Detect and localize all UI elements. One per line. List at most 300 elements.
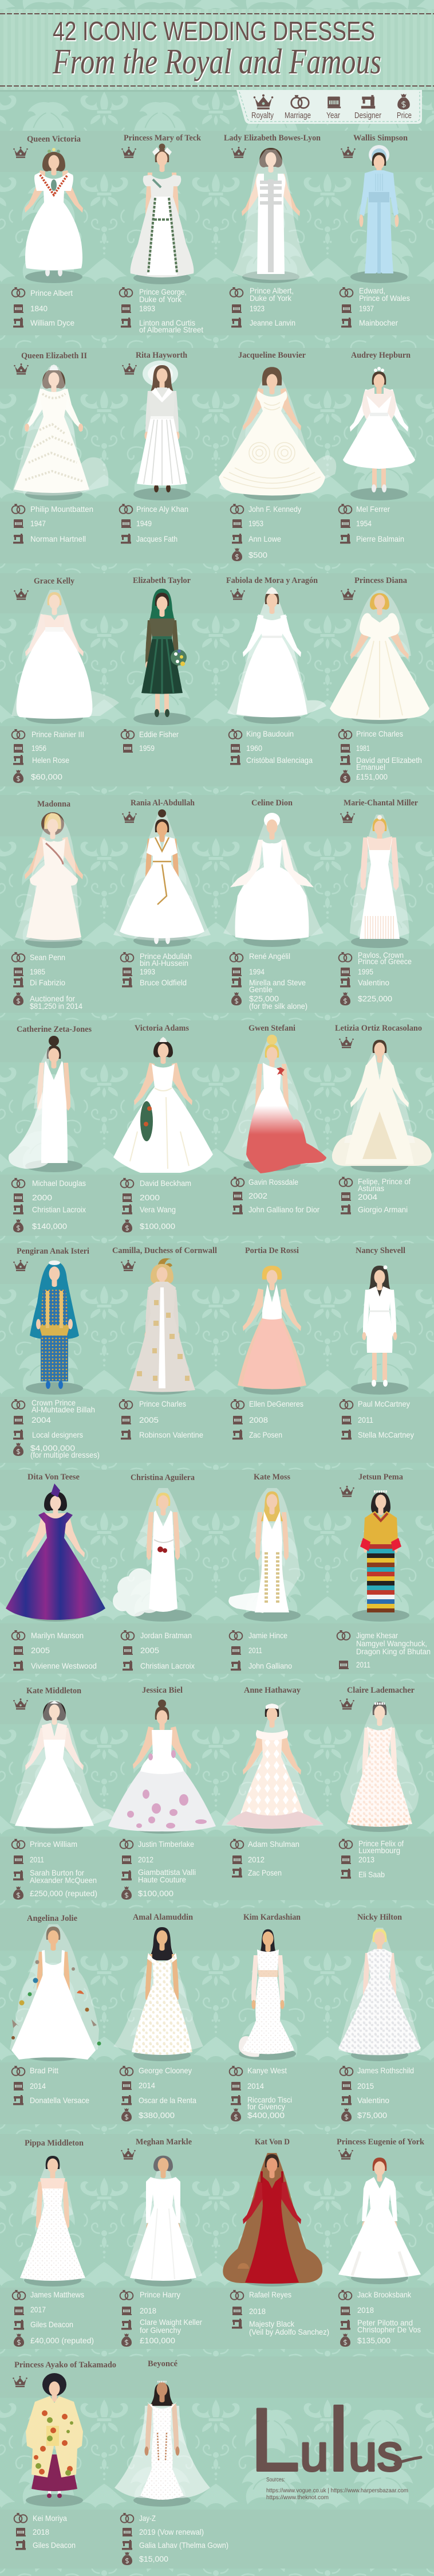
details: Pippa Middleton: [13, 2290, 94, 2347]
details: Catherine Zeta-Jones: [12, 1178, 86, 1232]
details: Dita Von Teese: Vivienne Westwood: [31, 1661, 97, 1670]
details: Marie-Chantal Miller: 1995: [358, 967, 373, 976]
card: Rita Hayworth: Rita Hayworth: [136, 351, 188, 360]
figure: Victoria Adams dress: [113, 1037, 213, 1173]
card: Celine Dion: Celine Dion: [251, 798, 293, 808]
details: Nancy Shevell: [340, 1399, 414, 1440]
details: Catherine Zeta-Jones: Christian Lacroix: [32, 1205, 86, 1214]
details: Victoria Adams: 2000: [140, 1193, 160, 1202]
card: Jacqueline Bouvier: [219, 351, 336, 561]
details: Marie-Chantal Miller: Pavlos, Crown: [358, 950, 404, 960]
card: Princess Diana: Princess Diana: [354, 576, 407, 585]
details: Marie-Chantal Miller: $225,000: [358, 994, 392, 1003]
details: Pengiran Anak Isteri: [12, 1398, 100, 1459]
figure: Catherine Zeta-Jones dress: [9, 1036, 82, 1172]
details: Kim Kardashian: $400,000: [247, 2111, 285, 2120]
details: Anne Hathaway: Zac Posen: [248, 1868, 282, 1877]
details: Kat Von D: 2018: [249, 2307, 266, 2316]
details: Audrey Hepburn: [339, 504, 404, 543]
details: Princess Eugenie of York: 2018: [357, 2305, 374, 2315]
details: Pippa Middleton: 2017: [30, 2305, 46, 2314]
sources: https://www.vogue.co.uk | https://www.harpersbazaar.com: [266, 2487, 408, 2494]
details: Gwen Stefani: 2002: [248, 1191, 267, 1200]
details: Victoria Adams: David Beckham: [140, 1179, 191, 1188]
figure: Jessica Biel dress: [108, 1700, 216, 1834]
figure: Grace Kelly dress: [11, 590, 119, 724]
details: Letizia Ortiz Rocasolano: Giorgio Armani: [358, 1205, 408, 1214]
details: Christina Aguilera: Christian Lacroix: [140, 1661, 195, 1670]
title banner: [0, 9, 434, 92]
details: Nancy Shevell: 2011: [358, 1415, 373, 1424]
figure: Madonna dress: [15, 812, 83, 948]
details: Grace Kelly: Prince Rainier III: [31, 730, 84, 739]
card: Kate Moss: Kate Moss: [254, 1473, 290, 1482]
details: Nancy Shevell: Paul McCartney: [358, 1399, 410, 1408]
card: Kim Kardashian: [230, 1913, 301, 2121]
details: Princess Ayako of Takamado: [14, 2513, 76, 2550]
card: Claire Lademacher: Claire Lademacher: [347, 1686, 415, 1695]
legend: Royalty: [251, 111, 274, 120]
card: Anne Hathaway: Anne Hathaway: [244, 1686, 301, 1695]
details: Kat Von D: Majesty Black: [249, 2319, 295, 2328]
details: Madonna: [12, 952, 82, 1011]
details: Wallis Simpson: [340, 286, 410, 328]
card: Wallis Simpson: [340, 134, 410, 328]
details: Victoria Adams: Vera Wang: [140, 1205, 176, 1214]
details: Elizabeth Taylor: 1959: [139, 743, 155, 753]
card: Dita Von Teese: Dita Von Teese: [27, 1473, 80, 1482]
legend: Year: [326, 111, 340, 120]
details: Marie-Chantal Miller: Valentino: [358, 978, 389, 987]
details: Jessica Biel: Haute Couture: [138, 1875, 186, 1884]
card: Princess Eugenie of York: [337, 2137, 425, 2347]
card: Amal Alamuddin: Amal Alamuddin: [133, 1913, 194, 1922]
figure: Anne Hathaway dress: [222, 1701, 323, 1834]
details: Princess Mary of Teck: Linton and Curtis: [139, 318, 195, 327]
details: Angelina Jolie: [12, 2066, 89, 2105]
card: Jessica Biel: Jessica Biel: [142, 1686, 183, 1695]
details: Fabiola de Mora y Aragón: 1960: [246, 743, 262, 753]
details: Camilla, Duchess of Cornwall: Prince Charles: [139, 1399, 186, 1408]
details: Catherine Zeta-Jones: $140,000: [32, 1222, 67, 1231]
figure: Nancy Shevell dress: [351, 1266, 408, 1395]
card: Portia De Rossi: [231, 1246, 306, 1440]
details: Jessica Biel: $100,000: [138, 1889, 173, 1898]
figure: Meghan Markle dress: [124, 2156, 202, 2287]
details: Princess Diana: David and Elizabeth: [356, 755, 422, 765]
details: Amal Alamuddin: [120, 2066, 196, 2121]
card: Pippa Middleton: Pippa Middleton: [25, 2139, 84, 2148]
figure: Queen Elizabeth II dress: [13, 365, 108, 500]
figure: Pippa Middleton dress: [20, 2156, 85, 2287]
details: Claire Lademacher: 2013: [358, 1855, 374, 1864]
card: Celine Dion: [223, 798, 323, 1011]
figure: Rania Al-Abdullah dress: [113, 809, 211, 947]
details: Fabiola de Mora y Aragón: King Baudouin: [246, 729, 294, 738]
figure: Kate Moss dress: [228, 1488, 301, 1622]
card: Madonna: Madonna: [37, 800, 70, 809]
details: Kat Von D: Rafael Reyes: [249, 2290, 291, 2299]
details: Pippa Middleton: £40,000 (reputed): [30, 2336, 94, 2345]
card: Portia De Rossi: Portia De Rossi: [245, 1246, 299, 1255]
figure: Camilla, Duchess of Cornwall dress: [129, 1258, 195, 1395]
details: Dita Von Teese: [12, 1630, 97, 1670]
details: Kat Von D: (Veil by Adolfo Sanchez): [249, 2327, 329, 2336]
details: Beyoncé: 2019 (Vow renewal): [139, 2527, 204, 2536]
card: Meghan Markle: [120, 2137, 202, 2347]
card: Gwen Stefani: Gwen Stefani: [248, 1024, 295, 1033]
details: Lady Elizabeth Bowes-Lyon: 1923: [250, 304, 265, 313]
details: Queen Victoria: Prince Albert: [30, 288, 73, 297]
details: Queen Elizabeth II: Philip Mountbatten: [30, 504, 93, 514]
details: Audrey Hepburn: Pierre Balmain: [356, 534, 404, 543]
details: Audrey Hepburn: Mel Ferrer: [356, 504, 390, 514]
details: Madonna: Auctioned for: [30, 994, 75, 1003]
details: Lady Elizabeth Bowes-Lyon: Duke of York: [250, 293, 292, 303]
details: Kim Kardashian: 2014: [247, 2081, 264, 2090]
figure: Beyoncé dress: [115, 2382, 210, 2507]
details: Meghan Markle: 2018: [140, 2306, 156, 2315]
details: Princess Mary of Teck: Duke of York: [139, 295, 182, 304]
card: Queen Elizabeth II: Queen Elizabeth II: [21, 351, 87, 361]
details: Madonna: $81,250 in 2014: [30, 1001, 82, 1011]
card: Grace Kelly: Grace Kelly: [34, 577, 74, 586]
figure: Fabiola de Mora y Aragón dress: [227, 587, 326, 724]
details: Christina Aguilera: [121, 1630, 195, 1670]
details: Jessica Biel: Giambattista Valli: [138, 1868, 196, 1877]
details: Meghan Markle: Clare Waight Keller: [140, 2317, 202, 2327]
details: Kim Kardashian: Riccardo Tisci: [247, 2095, 292, 2104]
details: Princess Mary of Teck: Prince George,: [139, 287, 187, 296]
details: Marie-Chantal Miller: [339, 950, 412, 1005]
details: Fabiola de Mora y Aragón: Cristóbal Balenciaga: [246, 755, 313, 765]
details: Pengiran Anak Isteri: 2004: [31, 1415, 51, 1424]
legend: Price: [397, 111, 412, 120]
card: Jessica Biel: [108, 1686, 216, 1900]
details: Nicky Hilton: [340, 2066, 414, 2121]
card: Audrey Hepburn: Audrey Hepburn: [351, 351, 411, 360]
details: Celine Dion: Mirella and Steve: [249, 978, 306, 987]
card: Madonna: [12, 800, 83, 1011]
card: Pippa Middleton: [13, 2139, 94, 2347]
details: Jacqueline Bouvier: [231, 504, 301, 561]
card: Queen Victoria: [12, 135, 83, 328]
figure: Princess Diana dress: [330, 590, 429, 724]
details: Pengiran Anak Isteri: Al-Muhtadee Billah: [31, 1405, 95, 1414]
card: Princess Mary of Teck: [120, 134, 203, 334]
details: Catherine Zeta-Jones: 2000: [32, 1193, 52, 1202]
figure: Jetsun Pema dress: [352, 1491, 409, 1622]
card: Amal Alamuddin: [113, 1913, 203, 2121]
details: Pippa Middleton: Giles Deacon: [30, 2320, 73, 2329]
figure: Audrey Hepburn dress: [343, 367, 415, 500]
logo: Lulus: Lulus: [250, 2390, 403, 2490]
details: Rania Al-Abdullah: 1993: [140, 967, 155, 976]
details: Kim Kardashian: for Givency: [247, 2102, 285, 2111]
details: Nicky Hilton: 2015: [357, 2081, 374, 2090]
details: Gwen Stefani: John Galliano for Dior: [248, 1205, 319, 1214]
details: Rania Al-Abdullah: Bruce Oldfield: [140, 978, 187, 987]
details: Elizabeth Taylor: Eddie Fisher: [139, 730, 179, 739]
details: Celine Dion: $25,000: [249, 994, 279, 1003]
figure: Celine Dion dress: [223, 813, 323, 947]
details: Angelina Jolie: 2014: [30, 2081, 46, 2090]
details: Queen Elizabeth II: 1947: [30, 519, 46, 528]
card: Marie-Chantal Miller: Marie-Chantal Miller: [344, 798, 418, 808]
card: Rania Al-Abdullah: [113, 798, 211, 987]
details: Princess Ayako of Takamado: Giles Deacon: [33, 2540, 76, 2550]
card: Meghan Markle: Meghan Markle: [136, 2137, 192, 2147]
card: Princess Diana: [330, 576, 429, 783]
card: Lady Elizabeth Bowes-Lyon: [224, 134, 321, 328]
card: Wallis Simpson: Wallis Simpson: [353, 134, 408, 143]
details: Grace Kelly: 1956: [31, 743, 46, 753]
figure: Queen Victoria dress: [25, 148, 83, 283]
card: Princess Ayako of Takamado: [13, 2360, 116, 2550]
details: Audrey Hepburn: 1954: [356, 519, 372, 528]
details: Kim Kardashian: Kanye West: [247, 2066, 287, 2075]
card: Nicky Hilton: [338, 1913, 421, 2121]
card: Letizia Ortiz Rocasolano: [332, 1024, 432, 1214]
card: Camilla, Duchess of Cornwall: [112, 1246, 217, 1440]
figure: Kat Von D dress: [223, 2153, 322, 2287]
details: Queen Victoria: 1840: [30, 304, 48, 313]
figure: Princess Mary of Teck dress: [131, 143, 194, 284]
figure: Pengiran Anak Isteri dress: [26, 1260, 83, 1395]
details: Princess Diana: £151,000: [356, 772, 388, 781]
details: Anne Hathaway: Adam Shulman: [248, 1839, 299, 1849]
details: Jetsun Pema: Namgyel Wangchuck,: [356, 1639, 427, 1648]
sources: [266, 2476, 408, 2501]
details: Marie-Chantal Miller: Prince of Greece: [358, 957, 412, 966]
details: Rita Hayworth: 1949: [136, 519, 152, 528]
figure: Christina Aguilera dress: [113, 1488, 192, 1622]
card: Princess Eugenie of York: Princess Eugenie of York: [337, 2137, 425, 2147]
details: Kate Middleton: [12, 1839, 97, 1900]
details: Jetsun Pema: 2011: [356, 1660, 370, 1669]
details: Beyoncé: Galia Lahav (Thelma Gown): [139, 2540, 228, 2550]
details: Grace Kelly: $60,000: [31, 772, 62, 781]
details: Fabiola de Mora y Aragón: [229, 729, 313, 765]
figure: Kate Middleton dress: [10, 1700, 116, 1834]
details: Queen Elizabeth II: [12, 504, 93, 543]
card: Angelina Jolie: Angelina Jolie: [27, 1914, 77, 1923]
details: Amal Alamuddin: $380,000: [139, 2111, 175, 2120]
details: Lady Elizabeth Bowes-Lyon: Prince Albert,: [250, 286, 294, 295]
details: Angelina Jolie: Donatella Versace: [30, 2096, 89, 2105]
details: Kate Moss: [230, 1630, 292, 1670]
card: Rita Hayworth: [120, 351, 191, 543]
figure: Jacqueline Bouvier dress: [219, 367, 336, 500]
card: Claire Lademacher: [340, 1686, 419, 1879]
details: Meghan Markle: Prince Harry: [140, 2290, 180, 2299]
details: Dita Von Teese: 2005: [31, 1646, 50, 1655]
card: Victoria Adams: Victoria Adams: [135, 1024, 189, 1033]
details: Pengiran Anak Isteri: Local designers: [32, 1430, 83, 1439]
figure: Dita Von Teese dress: [6, 1483, 105, 1622]
details: Princess Diana: Emanuel: [356, 762, 385, 772]
details: Jacqueline Bouvier: John F. Kennedy: [248, 504, 301, 514]
details: Rita Hayworth: Prince Aly Khan: [136, 504, 188, 514]
details: Portia De Rossi: Ellen DeGeneres: [249, 1399, 303, 1408]
details: Beyoncé: Jay-Z: [139, 2514, 156, 2523]
details: Letizia Ortiz Rocasolano: Felipe, Prince of: [358, 1177, 411, 1186]
details: Kate Middleton: Sarah Burton for: [30, 1868, 84, 1877]
figure: Nicky Hilton dress: [338, 1928, 421, 2061]
details: Madonna: Di Fabrizio: [30, 978, 65, 987]
card: Kate Middleton: Kate Middleton: [26, 1686, 82, 1696]
card: Dita Von Teese: [6, 1473, 105, 1670]
details: Kate Moss: 2011: [248, 1646, 262, 1655]
details: Queen Elizabeth II: Norman Hartnell: [30, 534, 86, 543]
details: Nicky Hilton: $75,000: [357, 2111, 387, 2120]
details: Meghan Markle: [120, 2290, 202, 2347]
card: Anne Hathaway: [222, 1686, 323, 1878]
card: Angelina Jolie: [10, 1914, 101, 2105]
details: Christina Aguilera: Jordan Bratman: [140, 1631, 192, 1640]
details: Meghan Markle: for Givenchy: [140, 2326, 181, 2335]
details: Kat Von D: [231, 2290, 329, 2336]
card: Christina Aguilera: Christina Aguilera: [131, 1473, 195, 1482]
card: Kim Kardashian: Kim Kardashian: [243, 1913, 301, 1922]
card: Victoria Adams: [113, 1024, 213, 1232]
details: Rania Al-Abdullah: [121, 952, 192, 987]
details: Princess Diana: 1981: [356, 743, 370, 753]
card: Princess Mary of Teck: Princess Mary of Teck: [124, 134, 202, 143]
details: Kate Middleton: 2011: [30, 1855, 44, 1864]
details: Victoria Adams: [121, 1178, 191, 1232]
details: Angelina Jolie: Brad Pitt: [30, 2066, 58, 2075]
figure: Claire Lademacher dress: [341, 1702, 419, 1832]
card: Beyoncé: [115, 2359, 228, 2565]
details: Rita Hayworth: [120, 504, 188, 543]
details: Letizia Ortiz Rocasolano: [340, 1177, 411, 1214]
details: Anne Hathaway: 2012: [248, 1855, 265, 1864]
figure: Kim Kardashian dress: [239, 1929, 296, 2060]
figure: Rita Hayworth dress: [133, 361, 191, 500]
details: Princess Mary of Teck: of Albemarle Street: [139, 325, 203, 334]
details: Jessica Biel: [120, 1839, 196, 1900]
details: Pengiran Anak Isteri: Crown Prince: [31, 1398, 76, 1407]
details: Lady Elizabeth Bowes-Lyon: Jeanne Lanvin: [250, 318, 295, 327]
details: Claire Lademacher: Eli Saab: [358, 1870, 385, 1879]
figure: Lady Elizabeth Bowes-Lyon dress: [232, 148, 314, 283]
card: Pengiran Anak Isteri: Pengiran Anak Isteri: [17, 1247, 89, 1256]
details: Wallis Simpson: Mainbocher: [359, 318, 398, 327]
details: Pengiran Anak Isteri: (for multiple dresses): [30, 1450, 100, 1459]
details: Kate Middleton: Prince William: [30, 1839, 77, 1849]
card: Kate Moss: [228, 1473, 301, 1670]
details: Celine Dion: René Angélil: [249, 952, 290, 961]
details: Princess Diana: [339, 729, 422, 783]
details: Pengiran Anak Isteri: $4,000,000: [30, 1443, 75, 1453]
details: Princess Eugenie of York: $135,000: [357, 2336, 390, 2345]
card: Audrey Hepburn: [339, 351, 415, 543]
figure: Portia De Rossi dress: [238, 1266, 306, 1395]
details: Christina Aguilera: 2005: [140, 1646, 159, 1655]
details: Portia De Rossi: [231, 1399, 303, 1440]
figure: Gwen Stefani dress: [223, 1035, 326, 1173]
details: Gwen Stefani: [231, 1177, 319, 1214]
card: Queen Elizabeth II: [12, 351, 108, 543]
card: Camilla, Duchess of Cornwall: Camilla, Duchess of Cornwall: [112, 1246, 217, 1255]
card: Grace Kelly: [11, 577, 119, 783]
details: Grace Kelly: Helen Rose: [32, 755, 69, 765]
details: Claire Lademacher: Luxembourg: [358, 1846, 400, 1855]
card: Jetsun Pema: Jetsun Pema: [358, 1473, 403, 1482]
card: Christina Aguilera: [113, 1473, 195, 1670]
card: Queen Victoria: Queen Victoria: [27, 135, 81, 144]
details: Wallis Simpson: Edward,: [359, 286, 385, 295]
sources: Sources:: [266, 2476, 285, 2483]
details: Rita Hayworth: Jacques Fath: [136, 534, 177, 543]
details: Jacqueline Bouvier: $500: [248, 550, 267, 559]
details: Portia De Rossi: 2008: [249, 1415, 268, 1424]
card: Fabiola de Mora y Aragón: Fabiola de Mora y Aragón: [226, 576, 318, 585]
details: Princess Eugenie of York: Jack Brooksbank: [357, 2290, 412, 2299]
details: Letizia Ortiz Rocasolano: 2004: [358, 1192, 377, 1201]
details: Queen Victoria: William Dyce: [30, 318, 74, 327]
card: Pengiran Anak Isteri: [12, 1247, 100, 1459]
details: Rania Al-Abdullah: Prince Abdullah: [140, 952, 192, 961]
card: Kat Von D: [223, 2137, 329, 2336]
details: Jacqueline Bouvier: Ann Lowe: [248, 534, 281, 543]
details: Lady Elizabeth Bowes-Lyon: [230, 286, 295, 328]
figure: Amal Alamuddin dress: [113, 1927, 203, 2061]
card: Kate Middleton: [10, 1686, 116, 1900]
details: Madonna: Sean Penn: [30, 953, 65, 962]
details: Letizia Ortiz Rocasolano: Asturias: [358, 1184, 384, 1193]
details: Beyoncé: $15,000: [139, 2554, 168, 2563]
card: Nancy Shevell: [340, 1246, 414, 1440]
details: Princess Ayako of Takamado: 2018: [33, 2527, 49, 2536]
details: Camilla, Duchess of Cornwall: Robinson Valentine: [139, 1430, 203, 1439]
details: Celine Dion: [230, 952, 307, 1011]
legend: Designer: [354, 111, 381, 120]
figure: Princess Ayako of Takamado kimono: [26, 2373, 83, 2507]
card: Rania Al-Abdullah: Rania Al-Abdullah: [131, 798, 195, 808]
details: Jessica Biel: Justin Timberlake: [138, 1839, 194, 1849]
details: Claire Lademacher: [340, 1839, 404, 1879]
details: Princess Eugenie of York: Christopher De Vos: [357, 2325, 421, 2334]
details: Elizabeth Taylor: [121, 729, 179, 753]
details: Madonna: 1985: [30, 967, 45, 976]
details: Jacqueline Bouvier: 1953: [248, 519, 263, 528]
details: Amal Alamuddin: George Clooney: [139, 2066, 192, 2075]
details: Amal Alamuddin: 2014: [139, 2081, 155, 2090]
details: Kim Kardashian: [230, 2066, 292, 2121]
details: Kate Middleton: £250,000 (reputed): [30, 1889, 97, 1898]
details: Dita Von Teese: Marilyn Manson: [31, 1631, 84, 1640]
details: Nicky Hilton: Valentino: [357, 2096, 389, 2105]
details: Celine Dion: 1994: [249, 967, 265, 976]
card: Jetsun Pema: [337, 1473, 431, 1669]
details: Kate Moss: Jamie Hince: [248, 1631, 287, 1640]
details: Gwen Stefani: Gavin Rossdale: [248, 1177, 298, 1187]
details: Kate Moss: John Galliano: [248, 1661, 292, 1670]
details: Jetsun Pema: [337, 1630, 431, 1669]
details: Celine Dion: Gentile: [249, 985, 273, 994]
details: Princess Eugenie of York: Peter Pilotto and: [357, 2318, 413, 2327]
legend: [236, 90, 422, 124]
details: Claire Lademacher: Prince Felix of: [358, 1839, 404, 1848]
details: Princess Mary of Teck: 1893: [139, 304, 155, 313]
details: Princess Eugenie of York: [339, 2290, 421, 2347]
details: Queen Victoria: [12, 287, 74, 328]
details: Camilla, Duchess of Cornwall: [120, 1399, 203, 1440]
details: Victoria Adams: $100,000: [140, 1222, 175, 1231]
card: Nicky Hilton: Nicky Hilton: [357, 1913, 403, 1922]
